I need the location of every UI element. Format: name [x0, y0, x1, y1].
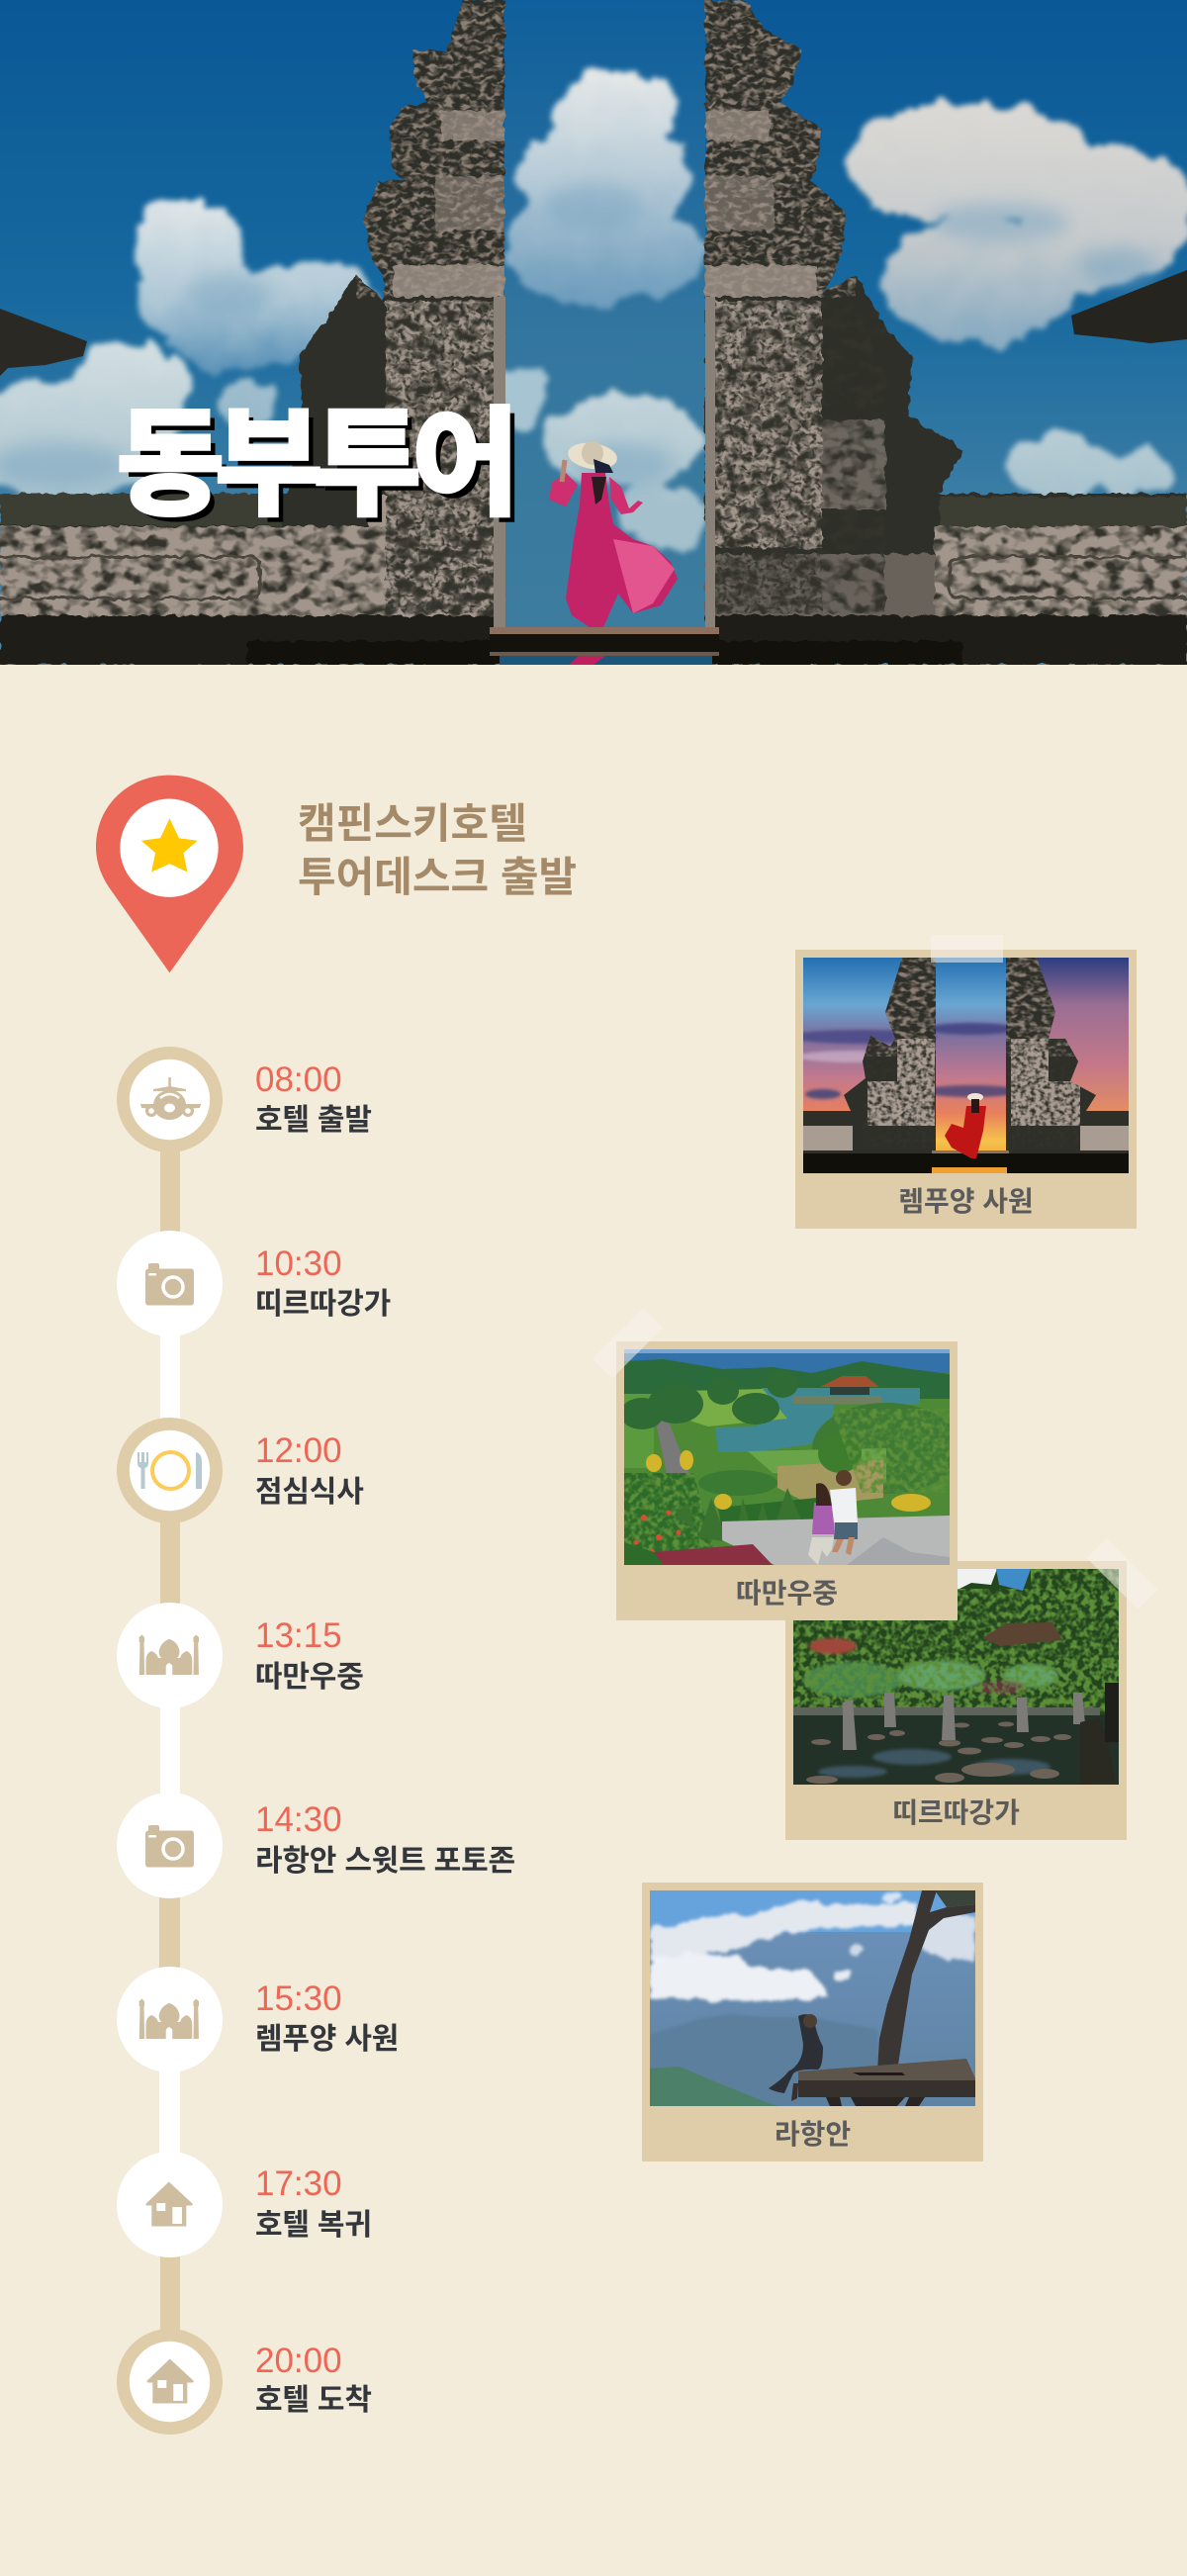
- tape: [593, 1308, 663, 1379]
- start heading: 캠핀스키호텔: [298, 800, 527, 847]
- stop 5 label: 라항안 스윗트 포토존: [255, 1845, 515, 1878]
- stop 6 label: 렘푸양 사원: [255, 2023, 399, 2056]
- roof corners: [0, 309, 87, 376]
- photo: water garden: [793, 1569, 1119, 1785]
- stop 6 time: 15:30: [255, 1979, 342, 2018]
- photo: garden and couple: [624, 1349, 950, 1565]
- stop 7 time: 17:30: [255, 2164, 342, 2203]
- caption: 따만우중: [736, 1578, 838, 1609]
- stop 4 icon: temple: [117, 1603, 223, 1707]
- stop 1 label: 호텔 출발: [255, 1104, 372, 1137]
- stop 3 time: 12:00: [255, 1431, 342, 1470]
- start heading: 투어데스크 출발: [298, 854, 577, 900]
- caption: 띠르따강가: [892, 1797, 1020, 1828]
- woman in pink dress: [549, 440, 678, 627]
- gate ledge and reflection: [490, 297, 719, 665]
- stop 5 icon: camera: [117, 1794, 223, 1898]
- start pin icon: [96, 776, 243, 973]
- stop 2 label: 띠르따강가: [255, 1288, 391, 1321]
- photo card: Lahangan: [642, 1883, 983, 2162]
- stop 4 label: 따만우중: [255, 1661, 364, 1694]
- tape: [1086, 1538, 1157, 1610]
- left gate tower and wall: [0, 0, 506, 665]
- cloud shading: [0, 183, 1157, 487]
- stop 7 icon: house: [117, 2153, 223, 2257]
- photo: mountain view platform: [650, 1890, 975, 2106]
- stop 3 label: 점심식사: [255, 1476, 364, 1509]
- stop 8 time: 20:00: [255, 2342, 342, 2380]
- photo: gate at sunset: [803, 958, 1129, 1173]
- stop 4 time: 13:15: [255, 1616, 342, 1655]
- stop 2 time: 10:30: [255, 1244, 342, 1283]
- tape: [931, 935, 1003, 963]
- clouds: [0, 71, 1187, 548]
- stop 5 time: 14:30: [255, 1800, 342, 1839]
- stop 8 label: 호텔 도착: [255, 2384, 372, 2417]
- stop 8 icon: house with ring: [117, 2329, 223, 2435]
- photo card: Tirta Gangga: [785, 1561, 1127, 1840]
- stop 7 label: 호텔 복귀: [255, 2209, 372, 2242]
- right gate tower and wall: [704, 0, 1187, 665]
- photo card: Taman Ujung: [616, 1341, 958, 1620]
- stop 2 icon: camera: [117, 1231, 223, 1335]
- stop 1 icon: airplane: [117, 1047, 223, 1151]
- start heading: [298, 800, 577, 900]
- caption: 렘푸양 사원: [898, 1186, 1034, 1217]
- caption: 라항안: [775, 2119, 851, 2150]
- stop 1 time: 08:00: [255, 1060, 342, 1099]
- hero photo: Lempuyang temple gate: [0, 0, 1187, 665]
- stop 6 icon: temple: [117, 1967, 223, 2071]
- photo card: Lempuyang: [795, 950, 1137, 1229]
- timeline connector bars: [159, 1151, 180, 2330]
- title: 동부투어: [117, 400, 510, 530]
- stop 3 icon: plate and cutlery: [117, 1418, 223, 1523]
